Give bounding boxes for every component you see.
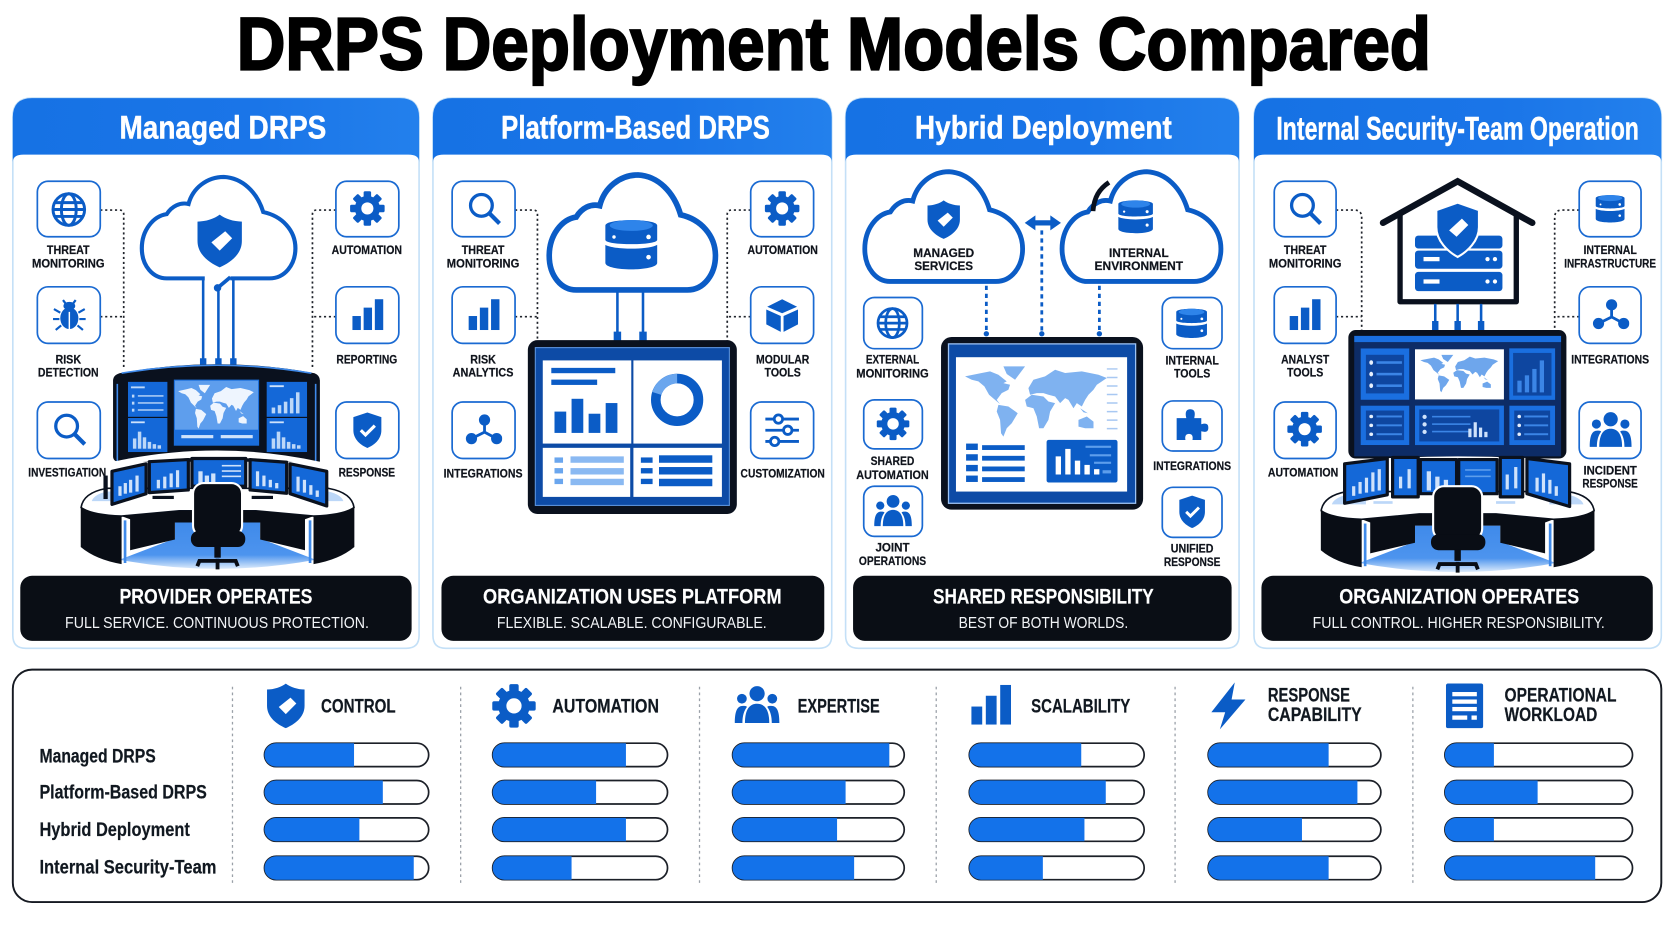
icon: integrations (1579, 287, 1641, 343)
operator chair (1431, 486, 1485, 573)
comparison table (13, 670, 1661, 902)
summary banner: ORGANIZATION OPERATES (1339, 585, 1579, 609)
label: threat monitoring: THREAT (47, 243, 90, 257)
dashboard list (966, 444, 1025, 482)
summary banner: FLEXIBLE. SCALABLE. CONFIGURABLE. (497, 615, 767, 632)
panel: Internal Security-Team Operation (1254, 98, 1661, 648)
summary banner (20, 576, 412, 641)
summary banner: FULL SERVICE. CONTINUOUS PROTECTION. (65, 615, 369, 632)
label: threat monitoring: THREAT (1284, 243, 1327, 257)
icon: automation (336, 181, 399, 237)
column: expertise: EXPERTISE (798, 696, 880, 717)
label: internal infrastructure: INTERNAL (1583, 243, 1637, 257)
label: threat monitoring: MONITORING (1269, 257, 1341, 271)
desk monitors (103, 459, 327, 506)
panel heading: Platform-Based DRPS (501, 110, 770, 146)
label: modular tools: TOOLS (765, 365, 801, 379)
column: response capability (1208, 682, 1381, 880)
column: scalability: SCALABILITY (1031, 696, 1130, 717)
label: internal tools: TOOLS (1174, 366, 1210, 380)
label: risk analytics: RISK (470, 353, 496, 367)
dashboard donut chart (656, 379, 698, 421)
icon: internal tools (1162, 297, 1222, 349)
icon: modular tools (751, 287, 814, 343)
row labels: Platform-Based DRPS (39, 783, 207, 804)
control room video wall (113, 364, 320, 466)
label: integrations: INTEGRATIONS (1571, 353, 1649, 367)
cloud with shield (142, 177, 295, 292)
control desk (81, 488, 354, 569)
label: incident response: RESPONSE (1582, 476, 1638, 490)
column: operational workload: WORKLOAD (1505, 705, 1597, 726)
cloud with database (549, 175, 715, 290)
column: operational workload (1445, 683, 1633, 880)
icon: automation (1274, 402, 1336, 459)
internal environment cloud: ENVIRONMENT (1095, 259, 1184, 273)
label: risk analytics: ANALYTICS (453, 365, 513, 379)
title: DRPS Deployment Models Compared (237, 1, 1431, 85)
dotted connectors (1336, 210, 1579, 331)
column: response capability: RESPONSE (1268, 686, 1350, 707)
operator chair (191, 483, 245, 569)
icon: joint operations (864, 486, 922, 536)
row labels: Hybrid Deployment (39, 820, 190, 841)
column: response capability: CAPABILITY (1268, 705, 1362, 726)
managed services cloud: MANAGED (913, 246, 974, 260)
label: response: RESPONSE (339, 466, 395, 480)
label: analyst tools: TOOLS (1287, 365, 1323, 379)
dashboard bar chart (551, 368, 617, 433)
panel heading: Hybrid Deployment (915, 110, 1172, 146)
panel header (846, 98, 1239, 162)
label: automation: AUTOMATION (332, 243, 402, 257)
icon: risk analytics (452, 287, 515, 343)
summary banner (1261, 576, 1653, 641)
icon: integrations (452, 402, 515, 459)
dotted links to dashboard (984, 230, 1102, 336)
column: automation: AUTOMATION (552, 696, 659, 717)
summary banner: PROVIDER OPERATES (119, 585, 312, 609)
internal environment cloud: INTERNAL (1109, 246, 1169, 260)
summary banner: ORGANIZATION USES PLATFORM (483, 585, 782, 609)
icon: threat monitoring (37, 181, 100, 237)
label: unified response: UNIFIED (1171, 541, 1214, 555)
internal environment cloud (1062, 172, 1221, 281)
label: automation: AUTOMATION (1268, 466, 1338, 480)
panel heading: Managed DRPS (119, 110, 326, 146)
row labels: Managed DRPS (39, 746, 156, 767)
dashboard lists (554, 455, 712, 486)
label: external monitoring: MONITORING (856, 366, 929, 380)
column: control: CONTROL (321, 696, 396, 717)
label: threat monitoring: THREAT (462, 243, 505, 257)
security operations video wall (1348, 330, 1567, 464)
panel: Hybrid Deployment (846, 98, 1239, 648)
house links with arrowheads (1432, 304, 1484, 331)
label: shared automation: SHARED (871, 454, 914, 468)
column: operational workload: OPERATIONAL (1505, 686, 1617, 707)
summary banner: FULL CONTROL. HIGHER RESPONSIBILITY. (1313, 615, 1605, 632)
summary banner: BEST OF BOTH WORLDS. (959, 615, 1128, 632)
column: expertise (733, 686, 904, 880)
column: scalability (969, 685, 1144, 880)
summary banner (853, 576, 1232, 641)
icon: investigation (37, 402, 100, 459)
icon: customization (751, 402, 814, 459)
icon: response (336, 402, 399, 459)
panel: Platform-Based DRPS (433, 98, 832, 648)
label: integrations: INTEGRATIONS (444, 467, 523, 481)
icon: unified response (1162, 487, 1222, 537)
dotted connectors (515, 210, 751, 341)
icon: internal infrastructure (1579, 181, 1641, 237)
icon: automation (751, 181, 814, 237)
label: risk detection: DETECTION (38, 365, 99, 379)
desk monitors (1345, 457, 1570, 506)
icon: incident response (1579, 402, 1641, 459)
row labels (39, 746, 216, 878)
icon: risk detection (37, 287, 100, 343)
icon: threat monitoring (452, 181, 515, 237)
label: modular tools: MODULAR (756, 353, 809, 367)
icon: shared automation (864, 400, 922, 449)
column: control (264, 684, 429, 880)
platform dashboard tablet (528, 340, 737, 514)
world map dashboard tablet (941, 337, 1143, 510)
panel header (433, 98, 832, 162)
label: threat monitoring: MONITORING (447, 257, 519, 271)
label: internal tools: INTERNAL (1165, 354, 1219, 368)
icon: analyst tools (1274, 287, 1336, 343)
panel header (1254, 98, 1661, 162)
label: joint operations: JOINT (875, 540, 910, 554)
control desk (1321, 492, 1594, 572)
managed services cloud: SERVICES (914, 259, 973, 273)
label: joint operations: OPERATIONS (859, 554, 926, 568)
managed services cloud (865, 172, 1023, 281)
label: threat monitoring: MONITORING (32, 257, 105, 271)
icon: external monitoring (864, 297, 922, 349)
label: incident response: INCIDENT (1583, 463, 1637, 477)
dashboard chart (1047, 440, 1118, 482)
row labels: Internal Security-Team (39, 857, 216, 878)
label: unified response: RESPONSE (1164, 555, 1220, 569)
label: integrations: INTEGRATIONS (1153, 459, 1231, 473)
label: reporting: REPORTING (336, 353, 397, 367)
dotted connectors (100, 210, 336, 368)
label: shared automation: AUTOMATION (856, 468, 929, 482)
summary banner (441, 576, 824, 641)
house with servers and shield (1383, 181, 1532, 302)
icon: integrations (1162, 401, 1222, 451)
label: analyst tools: ANALYST (1281, 353, 1330, 367)
column: automation (492, 684, 668, 880)
icon: reporting (336, 287, 399, 343)
panel header (13, 98, 419, 162)
double arrow between clouds (1025, 215, 1061, 230)
label: investigation: INVESTIGATION (28, 466, 106, 480)
panel: Managed DRPS (13, 98, 419, 648)
label: risk detection: RISK (55, 353, 81, 367)
label: customization: CUSTOMIZATION (741, 467, 825, 481)
label: automation: AUTOMATION (747, 243, 818, 257)
cloud links with arrowheads (200, 277, 237, 365)
cloud links with arrowheads (614, 291, 647, 341)
icon: threat monitoring (1274, 181, 1336, 237)
label: external monitoring: EXTERNAL (866, 353, 920, 367)
summary banner: SHARED RESPONSIBILITY (933, 585, 1154, 609)
